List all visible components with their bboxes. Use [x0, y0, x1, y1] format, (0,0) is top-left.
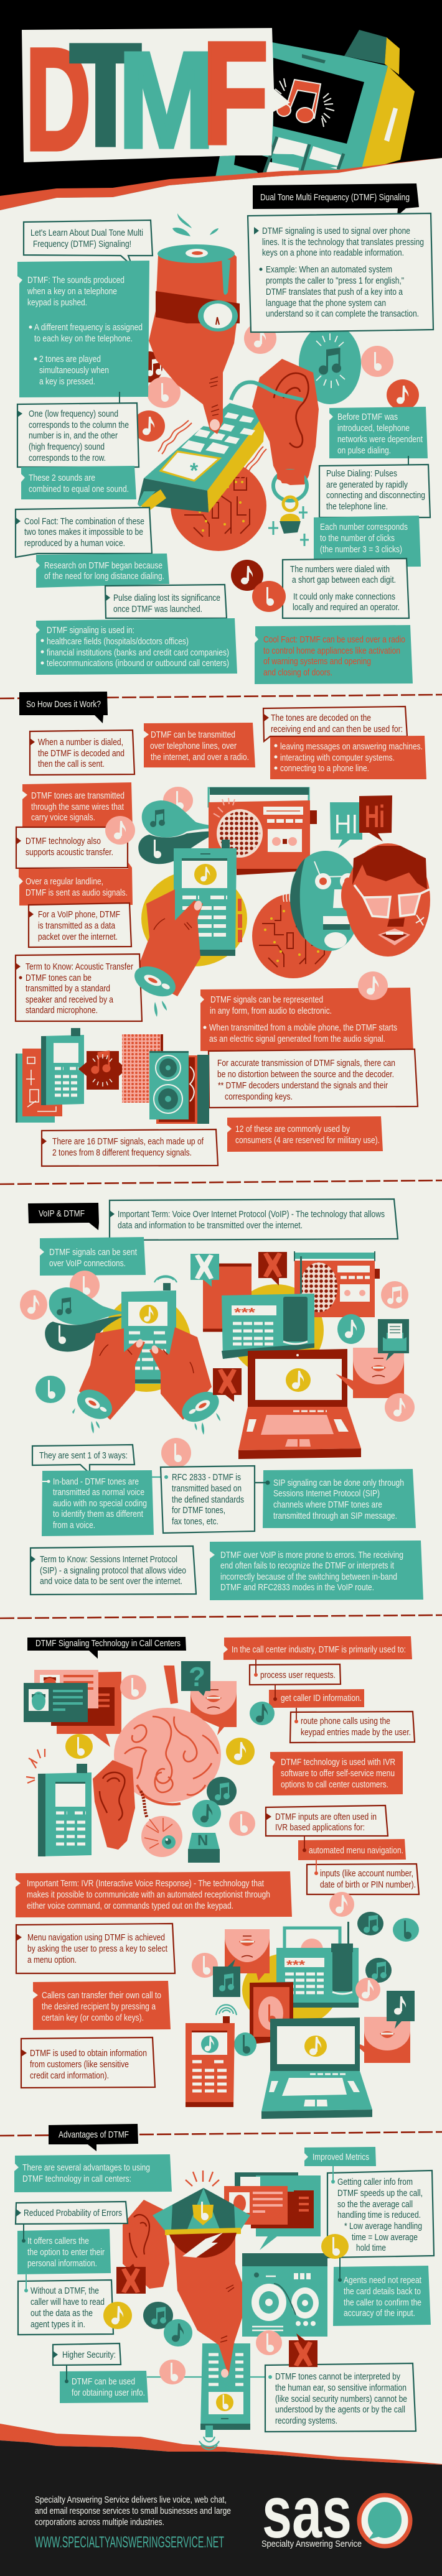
panel: agents need not repeat: the caller to confirm the	[344, 2297, 421, 2308]
panel: landline: DTMF is sent as audio signals.	[26, 887, 128, 898]
icon: pink note badge	[105, 816, 135, 845]
panel: tones cannot be interpreted: understood by the agents or by the call	[275, 2404, 405, 2415]
illustration: ear, police hat, pointing hand, recorder, phone	[116, 2171, 327, 2437]
panel: term to know SIP: Term to Know: Sessions Internet Protocol	[40, 1554, 177, 1565]
callout: sent 3 ways	[32, 1445, 134, 1473]
icon: pink note badge	[358, 971, 388, 1000]
panel: landline	[19, 863, 133, 906]
panel: important term IVR: makes it possible to communicate with an automated receptionist through	[27, 1889, 270, 1900]
panel: it offers callers: the option to enter their	[27, 2247, 105, 2258]
panel: uses of tones	[270, 736, 426, 779]
panel: RFC 2833: the defined standards	[172, 1494, 244, 1505]
panel: getting caller info: hold time	[356, 2243, 386, 2253]
divider	[0, 695, 442, 698]
panel: before DTMF: on pulse dialing.	[337, 445, 391, 456]
panel: cool fact: reproduced by a human voice.	[24, 538, 125, 549]
panel: route phone calls: keypad entries made by the user.	[301, 1727, 411, 1738]
panel: route phone calls	[290, 1708, 415, 1743]
panel: pulse dialing lost significance	[105, 585, 227, 618]
panel: radio cool fact: and closing of doors.	[263, 667, 332, 678]
panel: important term VoIP: Important Term: Voice Over Internet Protocol (VoIP) - The technology that allows	[118, 1209, 385, 1220]
panel: higher security	[53, 2343, 121, 2365]
divider	[0, 1180, 442, 1184]
panel: tones through wires: carry voice signals.	[31, 812, 95, 823]
panel: reduced probability of errors: Reduced Probability of Errors	[24, 2208, 122, 2218]
illustration: radio, phone in hand, robot and human faces: HI	[334, 809, 358, 840]
panel: tones cannot be interpreted: DTMF tones cannot be interpreted by	[275, 2371, 400, 2382]
heading: DTMF signaling	[253, 183, 419, 216]
panel: used in: healthcare fields (hospitals/doctors offices)	[47, 636, 189, 647]
panel: radio cool fact: to control home appliances like activation	[263, 646, 400, 656]
panel: obtaining user info	[60, 2365, 148, 2403]
panel: without DTMF	[18, 2274, 113, 2335]
panel: RFC 2833: transmitted based on	[172, 1483, 242, 1494]
panel: RFC 2833: fax tones, etc.	[172, 1516, 219, 1527]
panel: higher security: Higher Security:	[62, 2350, 116, 2360]
panel: several advantages: DTMF technology in call centers:	[22, 2174, 131, 2184]
icon: X bubble	[289, 2333, 317, 2367]
panel: DTMF sounds: keypad is pushed.	[27, 297, 87, 308]
panel: tones cannot be interpreted: recording systems.	[275, 2416, 337, 2426]
icon: pink note badge	[159, 2360, 186, 2384]
panel: SIP signaling: Sessions Internet Protocol (SIP)	[273, 1488, 380, 1499]
panel: two sounds combined: combined to equal one sound.	[29, 484, 129, 494]
panel: process user requests: process user requests.	[260, 1670, 336, 1680]
panel: numbers dialed: a short gap between each digit.	[292, 575, 396, 585]
panel: acoustic transfer support	[16, 827, 128, 868]
panel: can be transmitted: over telephone lines, over	[150, 741, 237, 751]
panel: agents need not repeat: the card details back to	[344, 2286, 421, 2297]
panel: pulse dialing: Pulse Dialing: Pulses	[326, 468, 397, 479]
panel: tones decoded: receiving end and can then be used for:	[271, 724, 403, 734]
panel: getting caller info: Getting caller info from	[337, 2177, 413, 2187]
panel: tones cannot be interpreted: (like social security numbers) cannot be	[275, 2394, 407, 2404]
panel: IVR applications: DTMF inputs are often used in	[275, 1812, 377, 1822]
panel: in-band: to identify them as different	[53, 1509, 144, 1519]
panel: number dialed: then the call is sent.	[38, 759, 105, 769]
footer text	[35, 2495, 231, 2527]
illustration: brain, ear, cards, phone, eye: N	[197, 1832, 208, 1849]
panel: pulse dialing	[319, 465, 430, 517]
logo: sas: Specialty Answering Service	[261, 2539, 362, 2549]
illustration: brain, ear, cards, phone, eye	[24, 1661, 275, 1863]
icon: yellow note badge	[321, 2234, 349, 2259]
panel: tones cannot be interpreted: the human ear, so sensitive information	[275, 2383, 407, 2393]
callout: sent 3 ways: They are sent 1 of 3 ways:	[39, 1450, 128, 1461]
panel: term to know SIP: (SIP) - a signaling protocol that allows video	[40, 1565, 186, 1576]
panel: term to know SIP	[31, 1546, 196, 1595]
panel: signals over VoIP: DTMF signals can be sent	[49, 1247, 138, 1258]
panel: accurate transmission: ** DTMF decoders understand the signals and their	[218, 1080, 388, 1091]
panel: DTMF signaling definition: language that the phone system can	[266, 298, 386, 308]
wrist cuff of hand	[129, 960, 181, 1003]
panel: important term IVR: either voice command, or commands typed out on the keypad.	[27, 1901, 233, 1911]
panel: VoIP errors: DTMF and RFC2833 modes in the VoIP route.	[220, 1582, 374, 1593]
panel: tones through wires	[22, 782, 133, 830]
illustration: big phone with music note	[215, 30, 415, 177]
heading: call centers	[27, 1637, 186, 1659]
title panel	[22, 12, 290, 180]
panel: term to know acoustic transfer: transmitted by a standard	[26, 983, 110, 994]
panel: research	[36, 554, 169, 588]
panel: pulse dialing lost significance: once DTMF was launched.	[113, 604, 202, 614]
logo: sas: sas	[262, 2472, 352, 2554]
panel: VoIP errors: incorrectly because of the switching between in-band	[220, 1572, 397, 1582]
callout: let's learn	[24, 220, 153, 266]
panel: agents need not repeat: accuracy of the input.	[344, 2308, 415, 2319]
footer url: WWW.SPECIALTYANSWERINGSERVICE.NET	[35, 2534, 224, 2551]
panel: automated menu navigation: automated menu navigation.	[309, 1845, 403, 1856]
callout: let's learn: Let's Learn About Dual Tone Multi	[31, 228, 143, 238]
connector	[152, 1476, 166, 1478]
panel: menu navigation: a menu option.	[27, 1955, 77, 1965]
panel: getting caller info	[327, 2166, 434, 2258]
panel: get caller ID: get caller ID information.	[281, 1693, 362, 1703]
panel: DTMF signaling definition: keys on a phone into readable information.	[262, 248, 404, 258]
panel: pulse dialing: are generated by rapidly	[326, 480, 408, 490]
panel: accurate transmission: be no distortion between the source and the decoder.	[217, 1069, 394, 1080]
panel: important term IVR: Important Term: IVR (Interactive Voice Response) - The technology that	[27, 1878, 265, 1889]
panel: VoIP errors: DTMF over VoIP is more prone to errors. The receiving	[220, 1550, 403, 1560]
panel: number dialed: When a number is dialed,	[38, 737, 123, 748]
panel: number dialed: the DTMF is decoded and	[38, 748, 125, 759]
panel: SIP signaling: SIP signaling can be done only through	[273, 1478, 404, 1488]
panel: automated menu navigation	[298, 1836, 406, 1860]
panel: numbers dialed: locally and required an operator.	[293, 602, 400, 613]
panel: DTMF sounds: simultaneously when	[39, 365, 109, 376]
panel: callers transfer	[33, 1981, 171, 2030]
panel: menu navigation: by asking the user to press a key to select	[27, 1944, 168, 1954]
panel: acoustic transfer support: DTMF technology also	[26, 836, 101, 846]
panel: callers transfer: certain key (or combo of keys).	[42, 2013, 144, 2023]
panel: it offers callers: It offers callers the	[27, 2236, 89, 2246]
panel: without DTMF: Without a DTMF, the	[31, 2286, 99, 2296]
illustration: devices for call center: ***	[286, 1958, 305, 1972]
footer text: corporations across multiple industries.	[35, 2517, 164, 2527]
illustration: radio, phone in hand, robot and human faces: Hi	[365, 799, 385, 834]
panel: VoIP phone	[29, 903, 131, 947]
panel: IVR software: software to offer self-service menu	[281, 1768, 395, 1779]
panel: term to know SIP: and voice data to be sent over the internet.	[40, 1576, 182, 1587]
panel: DTMF sounds: 2 tones are played	[39, 354, 101, 364]
panel: sixteen signals: There are 16 DTMF signals, each made up of	[52, 1136, 204, 1147]
panel: obtain information	[21, 2037, 155, 2088]
panel: before DTMF	[329, 407, 428, 458]
panel: DTMF signaling definition: prompts the caller to "press 1 for english,"	[266, 276, 404, 286]
panel: obtain information: credit card information).	[30, 2070, 109, 2081]
panel: term to know acoustic transfer	[16, 954, 142, 1021]
panel: menu navigation: Menu navigation using DTMF is achieved	[27, 1932, 165, 1943]
panel: DTMF signaling definition: DTMF translates that push of a key into a	[266, 287, 403, 297]
panel: process user requests	[250, 1659, 341, 1685]
panel: important term IVR	[16, 1871, 292, 1917]
panel: SIP signaling: channels where DTMF tones are	[273, 1499, 382, 1510]
panel: VoIP errors	[210, 1541, 423, 1600]
panel: getting caller info: * Low average handling	[344, 2221, 422, 2231]
panel: VoIP phone: is transmitted as a data	[38, 920, 116, 931]
illustration: devices, tablet, radio, desk phone, laptop: ***	[234, 1306, 255, 1320]
title panel: D	[26, 19, 91, 180]
panel: number of clicks: (the number 3 = 3 clicks)	[320, 544, 402, 555]
panel: IVR software: DTMF technology is used with IVR	[281, 1757, 395, 1768]
heading: VoIP and DTMF: VoIP & DTMF	[39, 1208, 85, 1219]
panel: used in: financial institutions (banks and credit card companies)	[47, 647, 229, 658]
panel: can be transmitted: the internet, and over a radio.	[151, 752, 249, 762]
panel: in-band: transmitted as normal voice	[53, 1487, 144, 1498]
footer background	[0, 2440, 442, 2576]
panel: inputs	[307, 1860, 419, 1894]
panel: obtain information: DTMF is used to obtain information	[30, 2048, 147, 2059]
panel: accurate transmission	[209, 1049, 418, 1108]
panel: DTMF sounds: to each key on the telephone.	[34, 333, 133, 344]
panel: it offers callers: personal information.	[27, 2258, 97, 2269]
heading: call centers: DTMF Signaling Technology in Call Centers	[35, 1638, 181, 1649]
panel: signals represented: in any form, from audio to electronic.	[210, 1006, 332, 1016]
panel: low and high frequency: number is in, and the other	[29, 430, 118, 441]
panel: accurate transmission: For accurate transmission of DTMF signals, there can	[217, 1058, 395, 1068]
panel: term to know acoustic transfer: speaker and received by a	[26, 994, 114, 1005]
panel: twelve commonly used: consumers (4 are reserved for military use).	[235, 1135, 380, 1146]
panel: DTMF signaling definition	[248, 213, 433, 332]
panel: several advantages	[14, 2154, 172, 2192]
panel: tones cannot be interpreted	[265, 2363, 416, 2432]
panel: route phone calls: route phone calls using the	[301, 1716, 390, 1726]
panel: DTMF signaling definition: Example: When an automated system	[266, 264, 392, 275]
divider	[0, 2132, 442, 2136]
panel: VoIP phone: For a VoIP phone, DTMF	[38, 909, 120, 920]
panel: in-band: from a voice.	[53, 1520, 95, 1531]
panel: IVR software	[270, 1751, 403, 1795]
panel: callers transfer: Callers can transfer their own call to	[42, 1990, 161, 2001]
panel: SIP signaling	[255, 1469, 416, 1528]
heading: so how does it work: So How Does it Work?	[26, 699, 101, 710]
panel: IVR software: options to call center customers.	[281, 1779, 388, 1790]
panel: RFC 2833	[161, 1466, 255, 1533]
panel: uses of tones: interacting with computer systems.	[280, 753, 395, 763]
callout: let's learn: Frequency (DTMF) Signaling!	[33, 239, 131, 249]
panel: low and high frequency: (high frequency) sound	[29, 442, 105, 452]
panel: agents need not repeat: Agents need not repeat	[344, 2275, 422, 2286]
panel: improved metrics	[304, 2147, 376, 2166]
panel: uses of tones: connecting to a phone line.	[280, 763, 369, 774]
panel: important term VoIP: data and information to be transmitted over the internet.	[118, 1220, 303, 1231]
panel: get caller ID	[269, 1684, 364, 1708]
panel: term to know acoustic transfer: Term to Know: Acoustic Transfer	[26, 961, 133, 972]
panel: radio cool fact: of warning systems and opening	[263, 656, 371, 667]
panel: signals represented: DTMF signals can be represented	[210, 994, 323, 1005]
panel: radio cool fact	[255, 625, 413, 684]
panel: acoustic transfer support: supports acoustic transfer.	[26, 847, 113, 858]
panel: obtaining user info: for obtaining user info.	[72, 2388, 145, 2398]
panel: DTMF sounds: A different frequency is assigned	[34, 322, 143, 333]
heading: advantages: Advantages of DTMF	[59, 2129, 129, 2140]
panel: number of clicks	[314, 516, 421, 567]
panel: term to know acoustic transfer: standard microphone.	[26, 1005, 98, 1016]
panel: several advantages: There are several advantages to using	[22, 2162, 150, 2173]
panel: signals over VoIP	[40, 1237, 146, 1276]
panel: low and high frequency: corresponds to the column the	[29, 420, 129, 430]
panel: VoIP phone: packet over the internet.	[38, 932, 118, 942]
panel: pulse dialing: the telephone line.	[326, 501, 388, 512]
panel: accurate transmission: corresponding keys.	[225, 1091, 293, 1102]
panel: numbers dialed: It could only make connections	[293, 591, 395, 602]
illustration: radio, phone in hand, robot and human faces	[131, 787, 430, 1017]
icon: signal arcs	[199, 2437, 219, 2449]
panel: research: of the need for long distance dialing.	[44, 571, 164, 581]
panel: getting caller info: time = Low average	[352, 2232, 418, 2243]
top black banner	[0, 0, 442, 211]
title panel: M	[118, 25, 215, 176]
panel: tones through wires: through the same wires that	[31, 802, 125, 812]
panel: menu navigation	[16, 1924, 175, 1973]
panel: obtain information: from customers (like sensitive	[30, 2059, 129, 2070]
panel: inputs: date of birth or PIN number).	[320, 1879, 416, 1890]
divider	[0, 1615, 442, 1618]
illustration: hands on phone with notes	[20, 1271, 242, 1435]
heading: so how does it work	[19, 692, 108, 723]
panel: used in	[36, 618, 237, 675]
panel: number of clicks: to the number of clicks	[320, 533, 395, 544]
panel: pulse dialing lost significance: Pulse dialing lost its significance	[113, 593, 220, 603]
panel: RFC 2833: for DTMF tones,	[172, 1505, 225, 1516]
icon: yellow note badge	[103, 2302, 132, 2329]
panel: SIP signaling: transmitted through an SIP message.	[273, 1511, 397, 1521]
panel: RFC 2833: RFC 2833 - DTMF is	[172, 1472, 241, 1483]
panel: numbers dialed	[283, 558, 409, 618]
panel: improved metrics: Improved Metrics	[313, 2152, 369, 2162]
panel: low and high frequency: One (low frequency) sound	[29, 409, 118, 419]
panel: twelve commonly used: 12 of these are commonly used by	[235, 1124, 350, 1134]
panel: it offers callers	[17, 2224, 111, 2274]
panel: reduced probability of errors	[16, 2202, 128, 2224]
illustration: devices, tablet, radio, desk phone, laptop	[190, 1251, 415, 1459]
panel: DTMF signaling definition: DTMF signaling is used to signal over phone	[262, 226, 410, 236]
panel: two sounds combined	[21, 466, 136, 499]
orange wave bottom	[0, 2424, 442, 2465]
panel: signals over VoIP: over VoIP connections.	[49, 1258, 126, 1269]
panel: low and high frequency	[17, 403, 139, 467]
panel: signals represented	[200, 988, 413, 1051]
panel: number dialed	[30, 730, 134, 775]
panel: tones through wires: DTMF tones are transmitted	[31, 790, 125, 801]
illustration: hand pressing keypad, ear and circuit: *	[190, 459, 199, 483]
panel: number of clicks: Each number corresponds	[320, 522, 408, 532]
panel: sixteen signals	[42, 1129, 218, 1166]
heading: advantages	[49, 2124, 138, 2151]
body background under wave	[0, 158, 442, 224]
panel: IVR applications: IVR based applications for:	[275, 1822, 365, 1833]
panel: signals represented: as an electric signal generated from the audio signal.	[209, 1034, 385, 1044]
illustration: circuit, phone, note tag, speaker	[16, 1028, 209, 1124]
heading: VoIP and DTMF	[28, 1203, 99, 1230]
panel: tones decoded	[263, 707, 407, 741]
panel: two sounds combined: These 2 sounds are	[29, 473, 95, 483]
panel: DTMF sounds: when a key on a telephone	[27, 286, 117, 297]
panel: DTMF sounds	[17, 261, 149, 397]
panel: sixteen signals: 2 tones from 8 different frequency signals.	[52, 1147, 192, 1158]
panel: twelve commonly used	[227, 1116, 383, 1152]
panel: term to know acoustic transfer: DTMF tones can be	[26, 973, 92, 983]
illustration: hand pressing keypad, ear and circuit	[133, 213, 419, 551]
panel: before DTMF: introduced, telephone	[337, 423, 410, 433]
panel: numbers dialed: The numbers were dialed with	[290, 564, 390, 575]
panel: cool fact: Cool Fact: The combination of these	[24, 516, 144, 527]
panel: can be transmitted: DTMF can be transmitted	[151, 730, 235, 740]
panel: callers transfer: the desired recipient by pressing a	[42, 2001, 156, 2012]
heading: DTMF signaling: Dual Tone Multi Frequency (DTMF) Signaling	[260, 192, 410, 203]
panel: DTMF sounds: a key is pressed.	[39, 376, 95, 387]
panel: without DTMF: out the data as the	[31, 2308, 93, 2319]
panel: without DTMF: caller will have to read	[31, 2297, 105, 2307]
panel: inputs: inputs (like account number,	[320, 1868, 413, 1879]
panel: before DTMF: networks were dependent	[337, 434, 423, 445]
panel: low and high frequency: corresponds to the row.	[29, 453, 106, 463]
title panel: F	[202, 12, 268, 174]
panel: agents need not repeat	[333, 2258, 431, 2326]
icon: note badges	[231, 560, 286, 612]
panel: can be transmitted	[144, 723, 255, 767]
panel: research: Research on DTMF began because	[44, 560, 162, 571]
panel: radio cool fact: Cool Fact: DTMF can be used over a radio	[263, 634, 405, 645]
panel: in-band	[42, 1470, 154, 1536]
connector	[408, 456, 409, 466]
footer text: and email response services to small businesses and large	[35, 2506, 231, 2516]
panel: IVR applications	[266, 1805, 388, 1836]
panel: in-band: In-band - DTMF tones are	[53, 1476, 139, 1487]
illustration: brain, ear, cards, phone, eye: ?	[189, 1662, 205, 1692]
panel: tones decoded: The tones are decoded on the	[271, 713, 371, 723]
panel: call center industry	[223, 1636, 412, 1660]
panel: getting caller info: so the the average call	[337, 2199, 413, 2210]
panel: DTMF sounds: DTMF: The sounds produced	[27, 275, 125, 285]
illustration: devices for call center	[186, 1892, 419, 2119]
panel: signals represented: When transmitted from a mobile phone, the DTMF starts	[209, 1022, 397, 1033]
panel: before DTMF: Before DTMF was	[337, 412, 398, 422]
panel: landline: Over a regular landline,	[26, 876, 103, 887]
title panel: T	[70, 14, 141, 176]
panel: obtaining user info: DTMF can be used	[72, 2376, 135, 2387]
panel: in-band: audio with no special coding	[53, 1498, 147, 1509]
icon: pink note badge	[161, 1438, 191, 1468]
panel: VoIP errors: end often fails to recognize the DTMF or interprets it	[220, 1560, 395, 1571]
footer text: Specialty Answering Service delivers live voice, web chat,	[35, 2495, 227, 2505]
panel: getting caller info: handling time is reduced.	[337, 2210, 421, 2220]
connector	[119, 392, 120, 404]
panel: used in: telecommunications (inbound or outbound call centers)	[47, 658, 229, 669]
panel: getting caller info: DTMF speeds up the call,	[337, 2188, 423, 2198]
panel: cool fact: two tones makes it impossible to be	[24, 527, 143, 537]
panel: without DTMF: agent types it in.	[31, 2319, 85, 2330]
panel: cool fact	[16, 507, 152, 557]
panel: important term VoIP	[110, 1199, 398, 1240]
orange wave top	[0, 158, 442, 210]
panel: used in: DTMF signaling is used in:	[47, 625, 134, 636]
